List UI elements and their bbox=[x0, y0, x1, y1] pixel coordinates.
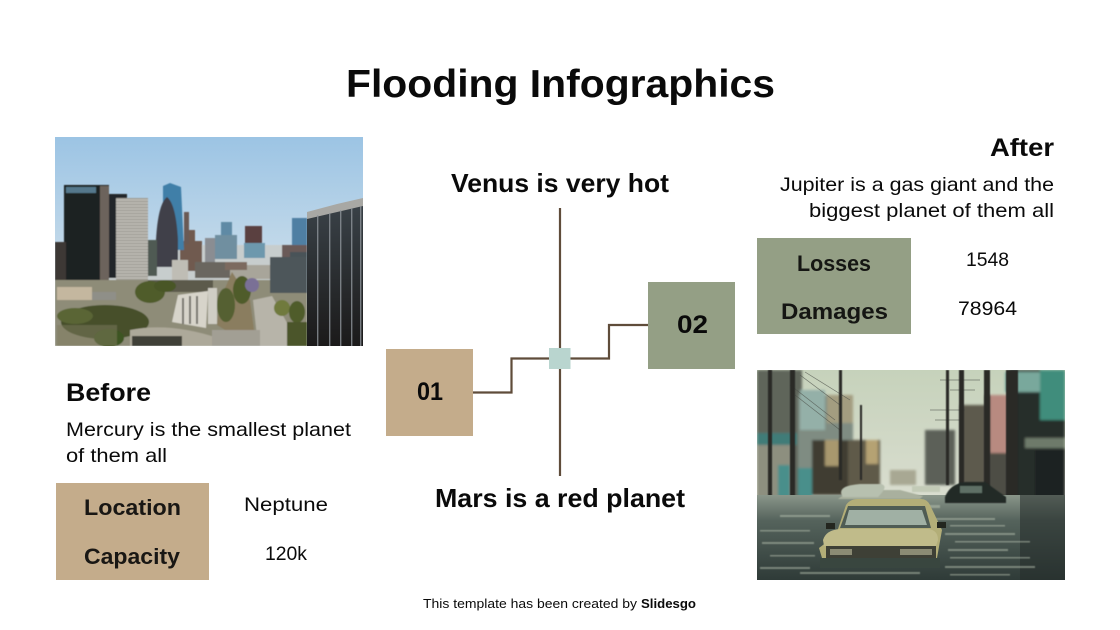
table: after: Damages bbox=[781, 299, 888, 324]
heading: Venus: Venus is very hot bbox=[451, 168, 669, 198]
heading: Mars: Mars is a red planet bbox=[435, 483, 685, 513]
heading: after: After bbox=[990, 134, 1054, 162]
footer credit: Slidesgo bbox=[641, 596, 696, 611]
table: before: Neptune bbox=[244, 494, 328, 516]
text: after description bbox=[780, 174, 1054, 222]
photo: flooded street after bbox=[757, 370, 1065, 580]
table: after: Losses bbox=[797, 251, 871, 276]
table: after bbox=[757, 238, 1017, 334]
text: before description bbox=[66, 419, 352, 467]
panel: after text bbox=[780, 134, 1054, 222]
heading: before: Before bbox=[66, 379, 151, 407]
diagram: connectors bbox=[473, 208, 648, 476]
panel: before text bbox=[66, 379, 352, 467]
photo: city before flooding bbox=[55, 137, 363, 347]
table: after: 1548 bbox=[966, 249, 1009, 271]
box 01: 01 bbox=[417, 378, 443, 406]
text: before description: of them all bbox=[66, 445, 167, 467]
box 02: 02 bbox=[677, 311, 708, 339]
text: after description: biggest planet of them all bbox=[809, 200, 1054, 222]
table: before: 120k bbox=[265, 543, 307, 565]
icon: car in flood bbox=[819, 499, 946, 568]
table: before: Location bbox=[84, 495, 181, 520]
text: after description: Jupiter is a gas giant and the bbox=[780, 174, 1054, 196]
center node bbox=[549, 348, 570, 369]
text: before description: Mercury is the smallest planet bbox=[66, 419, 352, 441]
box 02 bbox=[648, 282, 735, 369]
title: Flooding Infographics bbox=[346, 63, 775, 106]
footer credit: This template has been created by bbox=[423, 596, 638, 611]
table: after: 78964 bbox=[958, 298, 1017, 320]
table: before: Capacity bbox=[84, 544, 181, 569]
table: before bbox=[56, 483, 328, 580]
box 01 bbox=[386, 349, 473, 436]
